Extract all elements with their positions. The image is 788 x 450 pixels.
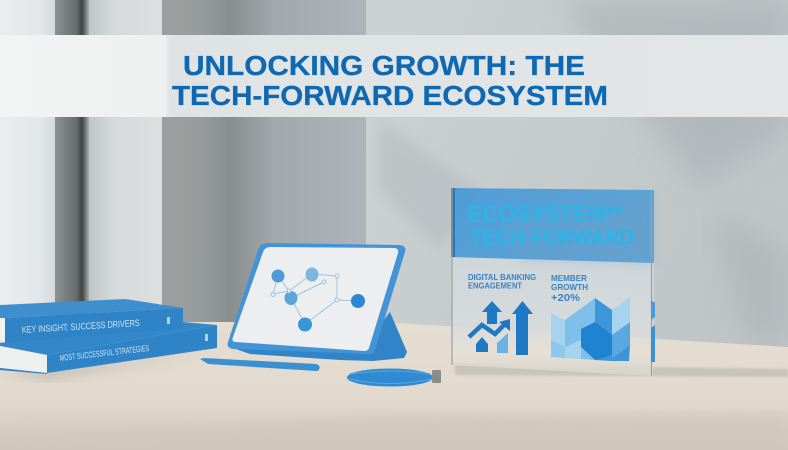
digital banking label bbox=[468, 273, 536, 290]
tablet stand bbox=[360, 312, 407, 361]
member growth label: GROWTH bbox=[551, 283, 588, 292]
wooden table bbox=[0, 322, 788, 450]
tablet screen bbox=[232, 247, 398, 351]
upper book: KEY INSIGHT: SUCCESS DRIVERS bbox=[21, 317, 140, 335]
tablet on stand bbox=[228, 243, 407, 361]
title: UNLOCKING GROWTH: THE bbox=[183, 50, 585, 81]
tablet frame bbox=[228, 243, 405, 354]
arrows icon: engagement chart bbox=[469, 301, 533, 355]
isometric growth chart bbox=[551, 297, 630, 361]
title bbox=[172, 50, 608, 111]
plaque lower panel bbox=[451, 257, 654, 376]
title: TECH-FORWARD ECOSYSTEM bbox=[172, 80, 608, 111]
books stack bbox=[0, 299, 220, 380]
plaque heading text bbox=[468, 201, 634, 250]
digital banking label: DIGITAL BANKING bbox=[468, 273, 536, 282]
acrylic plaque bbox=[451, 188, 655, 376]
member growth label bbox=[551, 274, 588, 304]
coiled cable bbox=[347, 368, 441, 386]
plaque reflection strip bbox=[651, 300, 655, 362]
stylus pen bbox=[200, 358, 320, 371]
lower book: MOST SUCCESSFUL STRATEGIES bbox=[59, 343, 150, 363]
title banner bbox=[0, 35, 788, 117]
digital banking label: ENGAGEMENT bbox=[468, 282, 522, 290]
member growth label: MEMBER bbox=[551, 274, 587, 283]
member growth label: +20% bbox=[551, 293, 580, 304]
lower book bbox=[0, 322, 217, 374]
plaque heading text: TECH-FORWARD bbox=[470, 224, 634, 250]
network diagram bbox=[271, 268, 365, 332]
plaque heading text: ECOSYSTEM** bbox=[468, 201, 624, 228]
plaque header bbox=[451, 188, 654, 263]
upper book bbox=[0, 299, 183, 343]
